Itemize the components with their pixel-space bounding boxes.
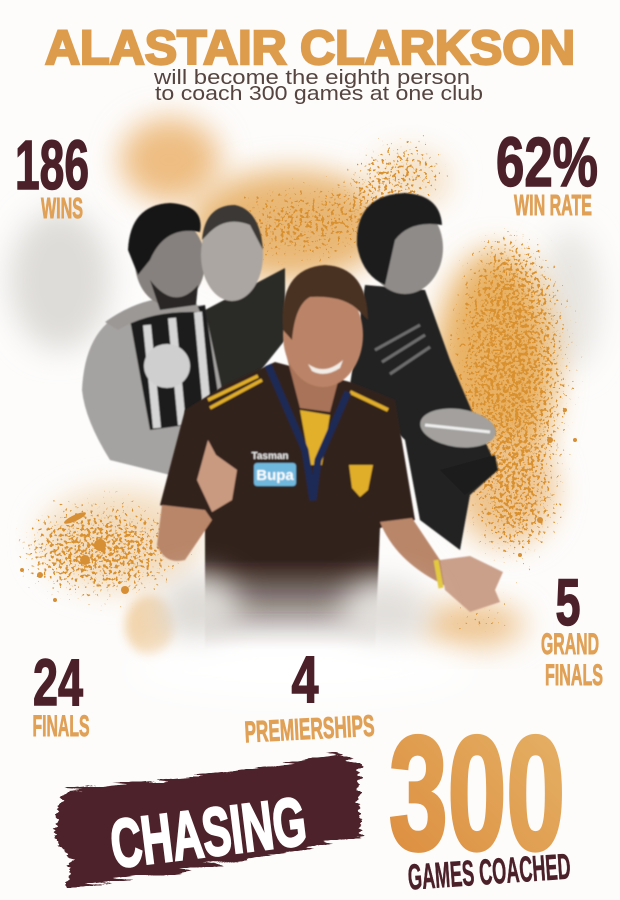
AFL badge	[144, 344, 190, 388]
football	[418, 404, 498, 452]
photo: coach in profile with football	[350, 193, 498, 550]
left hand	[197, 440, 237, 512]
stat: premierships: 4	[292, 642, 319, 716]
stat: grand finals: 5	[556, 565, 580, 639]
brush stroke banner	[54, 756, 362, 888]
subtitle	[153, 67, 483, 105]
arms	[157, 505, 212, 561]
stat: wins: WINS	[41, 193, 83, 225]
stat: win rate	[496, 123, 598, 222]
orange paint splash background	[10, 118, 600, 655]
collar	[300, 410, 330, 465]
fading lower body	[160, 362, 415, 650]
second figure torso	[205, 268, 285, 390]
subtitle: to coach 300 games at one club	[155, 83, 483, 105]
stat: finals: FINALS	[32, 710, 90, 743]
subtitle: will become the eighth person	[153, 67, 470, 89]
stat: wins	[15, 126, 89, 225]
photo: Alastair Clarkson in Hawks polo	[157, 265, 503, 650]
photo: Alastair Clarkson in Hawks polo: Tasman	[251, 451, 289, 462]
head	[283, 283, 363, 387]
stat: grand finals	[541, 565, 603, 692]
player head	[135, 218, 205, 306]
stat: finals: 24	[33, 645, 83, 719]
photo: player and coach embrace (greyscale)	[82, 203, 285, 475]
neck	[285, 350, 345, 412]
stat: premierships	[244, 642, 375, 749]
coach head	[201, 209, 263, 301]
gold shoulder stripes	[208, 376, 262, 408]
hawks logo	[349, 465, 373, 497]
stat: premierships: PREMIERSHIPS	[244, 710, 375, 749]
photo: Alastair Clarkson in Hawks polo: Bupa	[256, 467, 294, 484]
player arm and body	[82, 305, 225, 475]
right hand	[440, 556, 503, 612]
speckled paint grain	[10, 135, 575, 642]
stat: wins: 186	[15, 126, 89, 204]
title: ALASTAIR CLARKSON	[45, 22, 575, 75]
striped guernsey	[130, 305, 222, 430]
stat: finals	[32, 645, 90, 743]
sponsor badge	[254, 463, 296, 486]
wristband	[436, 560, 441, 588]
banner text: CHASING	[106, 783, 310, 883]
white smoke over lower photo	[130, 575, 470, 698]
